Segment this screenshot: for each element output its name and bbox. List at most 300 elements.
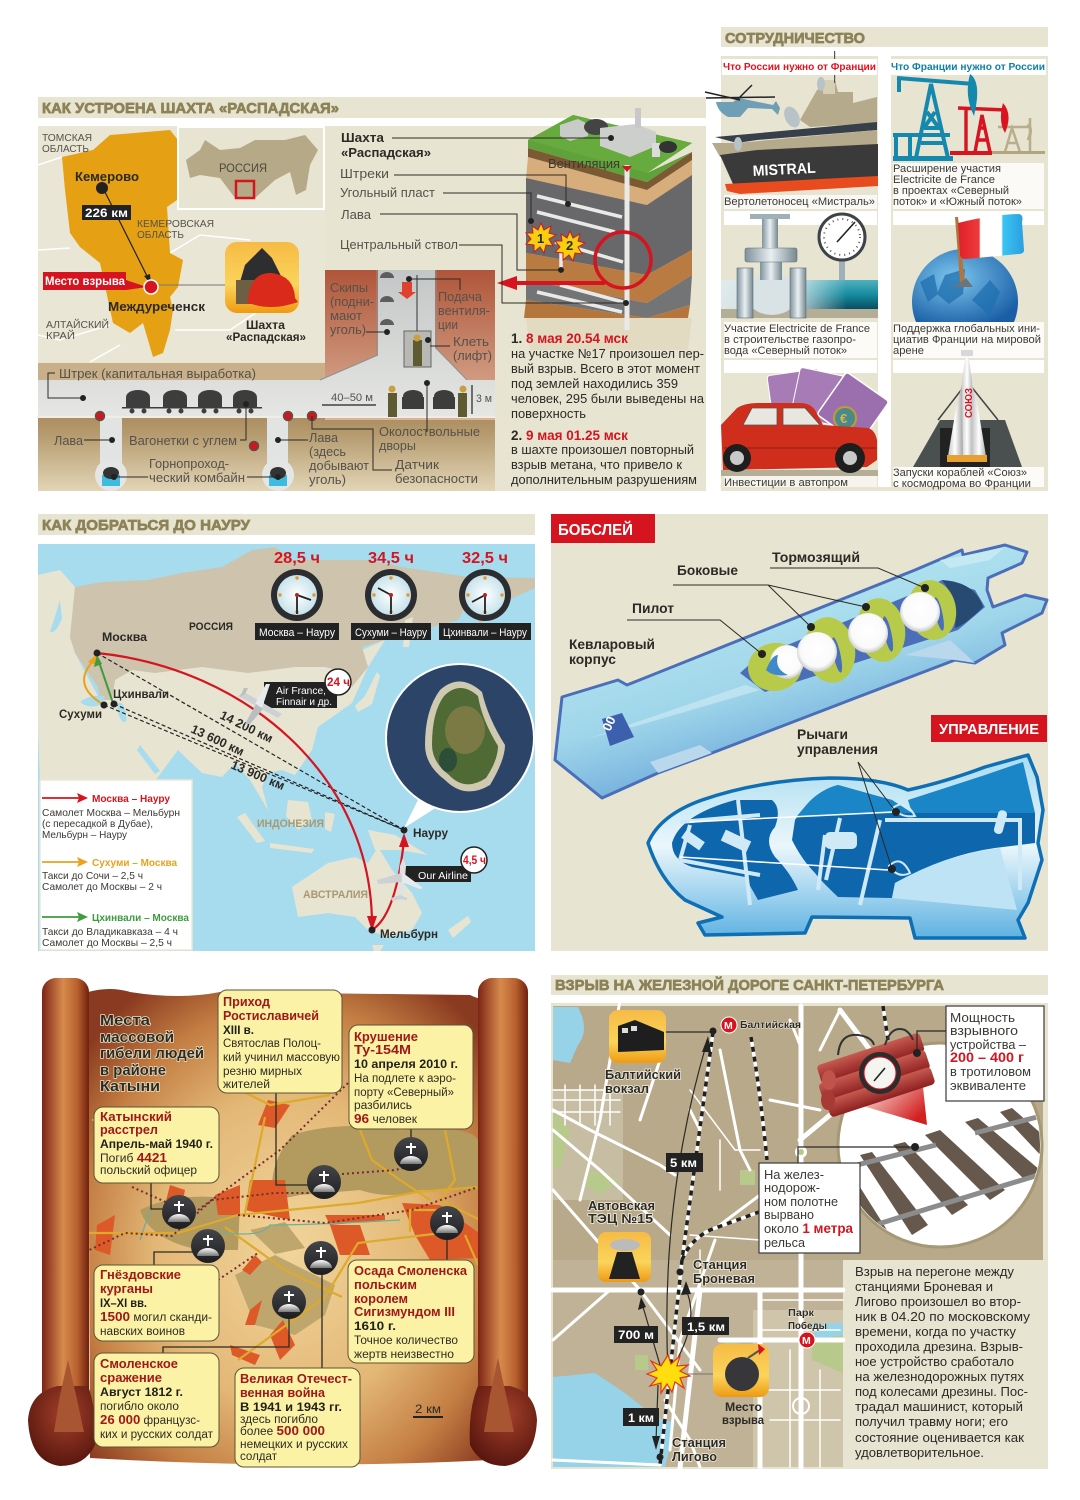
labels: section: ции [438,318,458,332]
panel: Nauru map [38,544,535,951]
labels: mine block: «Распадская» [341,145,431,160]
label: Raspadskaya icon: «Распадская» [226,332,306,344]
text: blast chronology: поверхность [511,406,586,421]
callout: Rostislavich: Святослав Полоц- [223,1038,321,1050]
distance arrows: 1 км [628,1413,654,1425]
label: blast site [722,1400,764,1427]
callout: Gnezdovo: навских воинов [100,1326,185,1338]
text: blast description: ник в 04.20 по московскому [855,1309,1031,1324]
text: blast chronology: на участке №17 произошел пер- [511,346,704,361]
callout: charge power: 200 – 400 г [950,1049,1024,1065]
caption: global initiatives: арене [893,345,924,357]
leader lines [48,276,472,480]
callout: siege of Smolensk: Точное количество [354,1335,458,1347]
title: Katyn: в районе [100,1062,166,1079]
callout: Smolensk battle: Август 1812 г. [100,1387,183,1399]
labels: section: Горнопроход- [149,457,229,471]
distances [189,708,287,793]
icon: coal and helmet [225,242,299,313]
callout: siege of Smolensk: королем [354,1291,408,1306]
callout: Katyn massacre: Катынский [100,1109,172,1124]
callout: charge power [913,1006,1044,1101]
text: blast description: Взрыв на перегоне между [855,1264,1015,1279]
clock Moscow [255,550,339,640]
labels: section: добывают [309,459,369,473]
diagram: underground cross-section [37,270,495,491]
illustration: Mistral ship [712,51,878,194]
text: blast description: под колесами дрезины. Пос- [855,1384,1028,1399]
caption: Soyuz launches [893,467,1044,490]
callout: Great Patriotic War: Великая Отечест- [240,1371,352,1386]
callout: Katyn massacre: польский офицер [100,1165,197,1177]
panel: bobsleigh [551,514,1048,951]
plane: Our Airline: Our Airline [418,870,468,882]
labels: section: уголь) [309,473,346,487]
icon: power plant [598,1232,651,1282]
label: Baltic station: Балтийский [605,1067,681,1082]
caption: expansion of participation [893,163,1044,209]
text: blast description: станциями Броневая и [855,1279,993,1294]
metro: Park Pobedy: М [802,1335,811,1347]
icon: bomb [713,1344,769,1397]
label: Raspadskaya icon: Шахта [246,320,286,332]
text: blast description: Лигово произошел во втор- [855,1294,1021,1309]
text: blast description: времени, когда по участку [855,1324,1016,1339]
text: blast chronology: взрыв метана, что привело к [511,457,682,472]
labels: section: безопасности [395,472,478,486]
header: Nauru: КАК ДОБРАТЬСЯ ДО НАУРУ [42,517,251,534]
text: blast chronology: 1. 8 мая 20.54 мск [511,331,628,346]
labels: section: Вагонетки с углем [129,434,237,448]
distances: 13 900 км [229,758,287,793]
labels: section: 3 м [476,393,492,405]
labels: section: Подача [438,290,482,304]
label: Bronevaya [693,1258,755,1286]
callout: torn rail: рельса [764,1235,806,1250]
callout: Smolensk battle: ких и русских солдат [100,1429,214,1441]
illustration: helicopter [705,85,780,117]
title: Katyn: массовой [100,1029,174,1046]
caption: expansion of participation: поток» и «Южный поток» [893,196,1022,208]
callout: Great Patriotic War: солдат [240,1451,278,1463]
caption: Electricite gas pipeline: Участие Electricite de France [724,323,870,335]
clock Sukhumi: Сухуми – Науру [355,627,427,639]
callout: torn rail: нодорож- [764,1180,820,1195]
callout: Tu-154M: порту «Северный» [354,1087,454,1099]
callout: Tu-154M: Ту-154М [354,1042,411,1057]
callout: siege of Smolensk [348,1260,474,1363]
callout: Great Patriotic War: немецких и русских [240,1439,348,1451]
labels: geography: Науру [413,826,448,840]
labels: geography: АВСТРАЛИЯ [303,889,368,901]
caption: Soyuz launches: Запуски кораблей «Союз» [893,467,1027,479]
callout: Katyn massacre: Погиб 4421 [100,1150,167,1165]
labels: mine block [340,130,629,306]
callout: Rostislavich: резню мирных [223,1066,302,1078]
legend: (с пересадкой в Дубае), [42,818,153,830]
inset: damaged rail [838,1043,1060,1247]
title: Katyn: гибели людей [100,1045,204,1062]
text: blast description [855,1264,1031,1460]
header: cooperation [721,27,1048,47]
labels: geography: Цхинвали [113,687,169,701]
callout: Rostislavich: кий учинил массовую [223,1052,340,1064]
callout: Rostislavich: Ростиславичей [223,1008,319,1023]
callout: Tu-154M: На подлете к аэро- [354,1073,456,1085]
labels: section: вентиля- [438,304,490,318]
text: blast description: традал машинист, который [855,1399,1023,1414]
labels: regions: КРАЙ [46,329,75,342]
clock Tskhinvali [439,550,531,640]
plane: Air France: Air France, [276,685,326,697]
label: Baltic station [605,1067,681,1096]
labels: section: 40–50 м [331,392,373,404]
diagram: mine block: Вентиляция [548,157,620,171]
legend: Самолет Москва – Мельбурн [42,807,180,819]
marker: blast site: Междуреченск [108,299,205,314]
callout: Great Patriotic War: здесь погибло [240,1414,318,1426]
illustration: globe and French flag [912,214,1024,322]
labels: section: (подни- [330,295,374,309]
labels and leaders: crew: Пилот [632,600,674,616]
callout: Gnezdovo: 1500 могил сканди- [100,1309,212,1324]
labels: section: дворы [379,439,416,453]
callout: Smolensk battle: 26 000 французс- [100,1412,200,1427]
scale: 2 km [413,1404,443,1418]
labels and leaders: crew: Кевларовый [569,636,655,652]
labels: section [54,281,492,487]
scale: 2 km: 2 км [415,1404,441,1416]
land masses [38,547,535,951]
label: Baltic station: вокзал [605,1081,649,1096]
illustration: euro banknotes: € [840,411,847,426]
strips [724,211,1044,373]
route: Kemerovo to Mezhdurechensk: Кемерово [75,169,139,184]
labels: geography: РОССИЯ [189,621,233,633]
text: blast description: проходила дрезина. Взрыв- [855,1339,1023,1354]
heading: bobsleigh: БОБСЛЕЙ [558,520,633,539]
illustration: bobsled interior [648,755,1043,938]
labels and leaders: crew: корпус [569,651,616,667]
labels: section: Датчик [395,458,440,472]
label: Raspadskaya icon [226,320,306,344]
legend: Такси до Владикавказа – 4 ч [42,926,178,938]
label: Bronevaya: Броневая [693,1272,755,1286]
clock Moscow: Москва – Науру [259,627,335,639]
left roller [28,978,95,1466]
legend: Сухуми – Москва [92,857,177,869]
red air arrow [622,166,632,172]
illustration: red car [721,403,878,476]
labels: regions: ОБЛАСТЬ [137,229,184,241]
callout: charge power: взрывного [950,1023,1018,1038]
text: blast description: удовлетворительное. [855,1445,984,1460]
text: blast chronology: под землей находились 359 [511,376,678,391]
labels: geography: ИНДОНЕЗИЯ [257,818,324,830]
caption: global initiatives: Поддержка глобальных ини- [893,323,1040,335]
labels: regions: ТОМСКАЯ [42,132,92,144]
callout: Rostislavich: XIII в. [223,1025,254,1037]
distance arrows: 1,5 км [687,1322,725,1334]
labels: section: Клеть [453,335,489,349]
illustration: gas valve and gauge [721,214,878,318]
route: Kemerovo to Mezhdurechensk: 226 км [85,208,128,220]
labels: regions: АЛТАЙСКИЙ [46,318,109,331]
callout: Smolensk battle: погибло около [100,1401,179,1413]
heading: controls: УПРАВЛЕНИЕ [939,721,1039,738]
marker: explosion [647,1355,713,1393]
illustration: oil pumps [893,74,1045,161]
distance arrows: 5 км [670,1158,697,1170]
label: Avtovskaya plant [588,1198,655,1226]
text: blast description: получил травму ноги; его [855,1414,1008,1429]
legend: Самолет до Москвы – 2 ч [42,881,162,893]
labels: geography [59,621,448,941]
labels: mine block: Лава [341,208,371,222]
illustration: Soyuz rocket: СОЮЗ [964,388,975,418]
callout: Gnezdovo: курганы [100,1281,153,1296]
text: blast chronology: в шахте произошел повторный [511,442,694,457]
metro: Baltiyskaya [721,1017,801,1033]
callout: Smolensk battle [94,1353,219,1447]
route arcs [84,650,409,934]
caption: Electricite gas pipeline: в строительстве газопро- [724,334,856,346]
labels: mine block: Шахта [341,130,385,145]
callout: charge power: Мощность [950,1010,1015,1025]
label: blast site: взрыва [722,1413,764,1427]
clock Moscow: 28,5 ч [274,550,320,567]
callout: Rostislavich [218,990,342,1093]
callout: Great Patriotic War: более 500 000 [240,1423,325,1438]
callout: Rostislavich: Приход [223,994,271,1009]
marker: blast site: Место взрыва [45,276,126,288]
text: blast description: состояние оценивается как [855,1430,1024,1445]
title: Katyn: Места [100,1012,151,1029]
callout: charge power: устройства – [950,1037,1027,1052]
header: railway blast: ВЗРЫВ НА ЖЕЛЕЗНОЙ ДОРОГЕ САНКТ-ПЕТЕРБУРГА [555,976,944,994]
label: Avtovskaya plant: ТЭЦ №15 [588,1211,653,1226]
caption: global initiatives: циатив Франции на мировой [893,334,1041,346]
caption: expansion of participation: Electricite de France [893,174,995,186]
illustration: dynamite [812,1029,936,1118]
label: control levers: Рычаги [797,726,848,742]
parchment [88,989,490,1465]
blast stars: 2 [566,238,573,253]
callout: Great Patriotic War: венная война [240,1385,326,1400]
labels: section: Скипы [330,281,368,295]
illustration: bobsled exterior [555,545,1047,798]
legend: Москва – Науру [92,793,170,805]
plane: Air France [238,669,351,724]
text: blast chronology: человек, 295 были выведены на [511,391,705,406]
legend [40,780,192,950]
labels: mine block: Центральный ствол [340,238,458,252]
tunnels [537,165,627,330]
labels: section: ческий комбайн [149,471,245,485]
callout: torn rail: ном полотне [764,1194,838,1209]
callout: Tu-154M: разбились [354,1100,412,1112]
caption: expansion of participation: в проектах «Северный [893,185,1009,197]
label: Avtovskaya plant: Автовская [588,1198,655,1213]
label: Ligovo: Лигово [672,1450,717,1464]
text: blast chronology: вый взрыв. Всего в этот момент [511,361,700,376]
label: Bronevaya: Станция [693,1258,747,1272]
text: blast chronology: дополнительным разрушениям [511,472,697,487]
label: Ligovo [672,1436,726,1464]
callout: charge power: эквиваленте [950,1078,1026,1093]
illustration: Mistral ship: MISTRAL [752,160,816,180]
inset: Russia locator: РОССИЯ [219,163,267,175]
labels: mine block: Штреки [340,167,389,181]
heading: bobsleigh [551,514,655,543]
header: cooperation: СОТРУДНИЧЕСТВО [725,30,865,47]
caption: Soyuz launches: с космодрома во Франции [893,478,1031,490]
callout: charge power: в тротиловом [950,1064,1031,1079]
callout: Gnezdovo: IX–XI вв. [100,1298,147,1310]
wagons [122,390,262,414]
panel: cooperation [705,51,1048,491]
callout: Katyn massacre: расстрел [100,1122,158,1137]
labels: regions [42,132,214,342]
title: Katyn: Катыни [100,1078,160,1095]
header: mine [38,97,706,118]
sensors [96,412,316,450]
plane: Air France: Finnair и др. [276,696,332,708]
distances: 13 600 км [189,722,246,759]
text: blast chronology [511,331,705,487]
clock Tskhinvali: Цхинвали – Науру [443,627,527,639]
labels: section: уголь) [330,323,366,337]
callout: Tu-154M: 96 человек [354,1111,418,1126]
clock Tskhinvali: 32,5 ч [462,550,508,567]
caption: global initiatives [893,322,1044,358]
map: St Petersburg [553,1000,1043,1468]
caption: expansion of participation: Расширение участия [893,163,1001,175]
callout: siege of Smolensk: жертв неизвестно [354,1349,454,1361]
callout: torn rail: вырвано [764,1207,814,1222]
route: Kemerovo to Mezhdurechensk [75,169,151,284]
callout: siege of Smolensk: 1610 г. [354,1321,396,1333]
metro: Baltiyskaya: М [724,1020,733,1032]
callout: torn rail: около 1 метра [764,1221,853,1236]
labels: section: Штрек (капитальная выработка) [59,367,256,381]
panel: mine [37,108,706,491]
map: terrain around Katyn [85,1083,482,1365]
label: control levers [797,726,900,873]
distances: 14 200 км [218,708,275,746]
labels: regions: КЕМЕРОВСКАЯ [137,218,214,230]
labels: mine block: Угольный пласт [340,186,435,200]
callout: siege of Smolensk: Сигизмундом III [354,1304,455,1319]
highlight circle and arrow [497,232,651,290]
callout: Great Patriotic War [235,1368,360,1467]
callout: Tu-154M: 10 апреля 2010 г. [354,1059,458,1071]
metro: Park Pobedy: Парк [788,1307,815,1319]
distance arrows [614,1028,729,1460]
heading: what France needs: Что Франции нужно от России [891,61,1045,73]
callout: Great Patriotic War: В 1941 и 1943 гг. [240,1402,342,1414]
legend: Самолет до Москвы – 2,5 ч [42,937,172,949]
text: blast chronology: 2. 9 мая 01.25 мск [511,428,628,443]
surface buildings [560,108,677,157]
icon: train station [609,1010,666,1063]
label: Ligovo: Станция [672,1436,726,1450]
labels and leaders: crew: Тормозящий [772,549,860,565]
callout: Gnezdovo: Гнёздовские [100,1267,181,1282]
callout: Rostislavich: жителей [223,1079,270,1091]
caption: Electricite gas pipeline: вода «Северный поток» [724,345,847,357]
skips, cage and miners [380,272,467,417]
blast stars: 1 [537,231,544,246]
callout: torn rail: На желез- [764,1167,824,1182]
title: Katyn [100,1012,204,1095]
labels and leaders: crew: Боковые [677,562,738,578]
marker: blast site [43,272,225,314]
legend: Цхинвали – Москва [92,912,189,924]
caption: car investment: Инвестиции в автопром [724,477,848,489]
header: Nauru [38,514,535,535]
panel: Katyn scroll [28,978,537,1467]
labels: section: Околоствольные [379,425,480,439]
labels: section: (лифт) [453,349,492,363]
callout: Smolensk battle: сражение [100,1370,162,1385]
panel: railway blast [551,1000,1060,1469]
rail lines [660,1006,888,1465]
labels: section: (здесь [309,445,346,459]
legend: Мельбурн – Науру [42,829,128,841]
callout: Smolensk battle: Смоленское [100,1356,178,1371]
labels: section: мают [330,309,362,323]
diagram: mine block [497,108,692,350]
blast stars [526,223,585,261]
illustration: euro banknotes [767,367,889,444]
metro: Baltiyskaya: Балтийская [740,1019,801,1031]
labels: regions: ОБЛАСТЬ [42,143,89,155]
leaders [151,1093,447,1368]
callout: Gnezdovo [94,1265,219,1341]
inset: Nauru island photo [386,664,534,828]
plane: Air France: 24 ч [327,677,350,689]
callout: Tu-154M: Крушение [354,1029,418,1044]
caption: Mistral: Вертолетоносец «Мистраль» [724,196,875,208]
right roller [470,978,537,1466]
distance arrows: 700 м [618,1330,654,1342]
illustration: Soyuz rocket [913,346,1022,467]
callout: torn rail [759,1143,919,1253]
plane: Our Airline: 4,5 ч [463,855,486,867]
labels: section: Лава [54,434,83,448]
header: railway blast [551,975,1048,995]
label: blast site: Место [725,1400,762,1414]
metro: Park Pobedy: Победы [788,1320,827,1332]
heading: controls [931,715,1047,742]
callout: Katyn massacre [94,1107,219,1183]
labels: geography: Москва [102,630,147,644]
graves [162,1137,464,1319]
labels: geography: Сухуми [59,707,102,721]
map: Kemerovo region [38,126,325,362]
inset: Russia locator [178,127,324,209]
caption: Electricite gas pipeline [724,322,877,358]
metro: Park Pobedy [788,1307,827,1348]
callout: siege of Smolensk: польским [354,1277,417,1292]
label: control levers: управления [797,741,878,757]
text: blast description: ное устройство сработало [855,1354,1014,1369]
labels and leaders: crew [569,549,929,667]
heading: what Russia needs: Что России нужно от Франции [723,61,876,73]
illustration: bobsled exterior: 00 [599,714,619,733]
labels: geography: Мельбурн [380,927,438,941]
